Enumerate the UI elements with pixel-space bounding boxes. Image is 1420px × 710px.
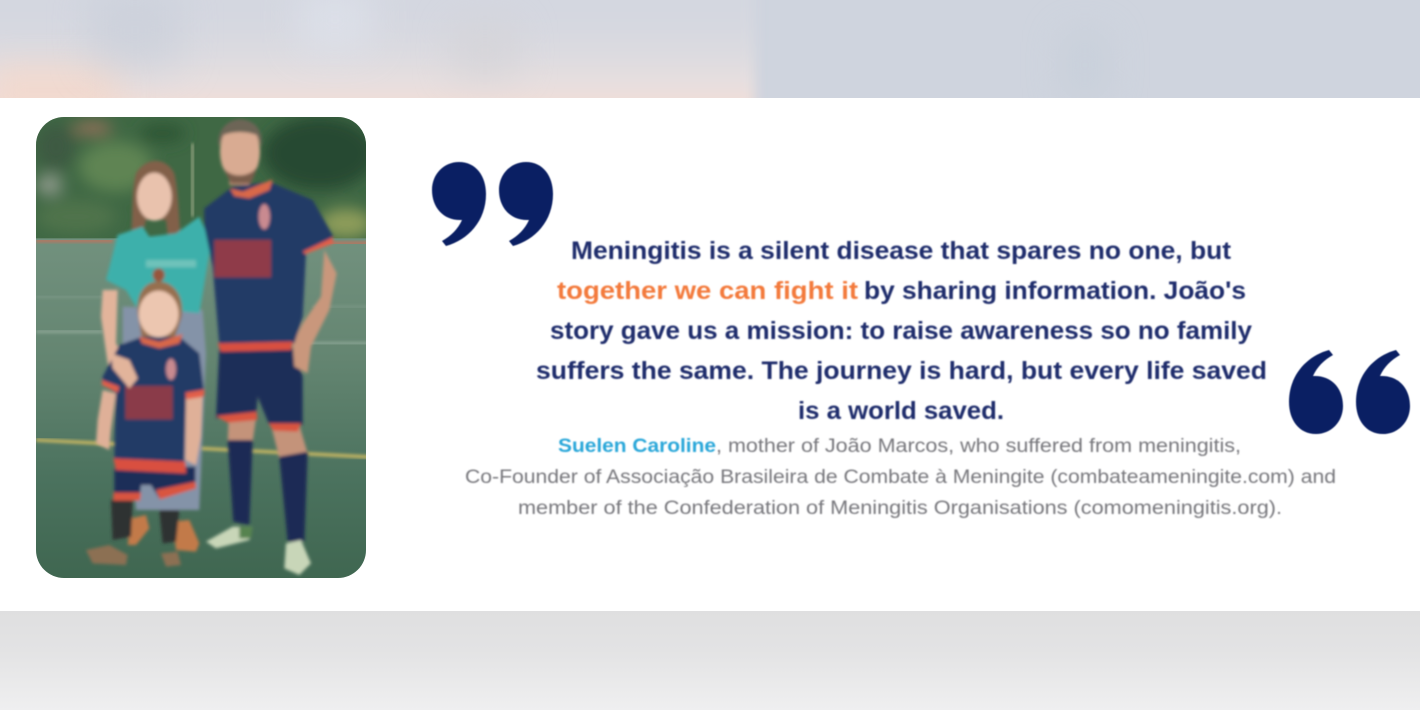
quote [536, 237, 1267, 425]
quote: suffers the same. The journey is hard, but every life saved [536, 357, 1267, 385]
woman: shoes [128, 515, 199, 552]
man: shirt [204, 182, 333, 345]
attribution: Co-Founder of Associação Brasileira de Combate à Meningite (combateameningite.com) and [465, 467, 1336, 488]
woman: face [137, 173, 172, 221]
man: arm [293, 250, 337, 373]
bottom blurred band [0, 611, 1420, 710]
attribution [465, 436, 1336, 519]
quote: story gave us a mission: to raise awareness so no family [550, 317, 1252, 345]
girl: shirt [103, 337, 204, 463]
woman: hand over girl [111, 353, 138, 388]
opening quotation mark [431, 161, 554, 247]
quote: together we can fight it [557, 277, 859, 305]
man: shorts [216, 348, 303, 425]
girl: legs [111, 500, 179, 543]
man: head [229, 175, 249, 185]
woman: arm [98, 287, 121, 367]
girl: head [153, 268, 165, 282]
attribution: member of the Confederation of Meningitis Organisations (comomeningitis.org). [518, 498, 1282, 519]
top blurred band [0, 0, 1420, 98]
quote: is a world saved. [798, 397, 1004, 425]
man: socks and legs [228, 418, 308, 458]
attribution: , mother of João Marcos, who suffered from meningitis, [716, 436, 1241, 457]
girl: arms [96, 390, 203, 465]
background [36, 117, 366, 238]
man: shoes [206, 527, 311, 575]
closing quotation mark [1288, 349, 1411, 435]
girl: shorts [114, 467, 195, 500]
woman: shirt [106, 217, 211, 313]
quote and attribution text [465, 237, 1336, 519]
woman: hair [131, 161, 181, 250]
quote: by sharing information. João's [864, 277, 1246, 305]
photo: family on a football pitch [36, 117, 366, 578]
quote: Meningitis is a silent disease that spares no one, but [571, 237, 1232, 265]
woman: jeans [123, 307, 206, 510]
attribution: Suelen Caroline [558, 436, 716, 457]
